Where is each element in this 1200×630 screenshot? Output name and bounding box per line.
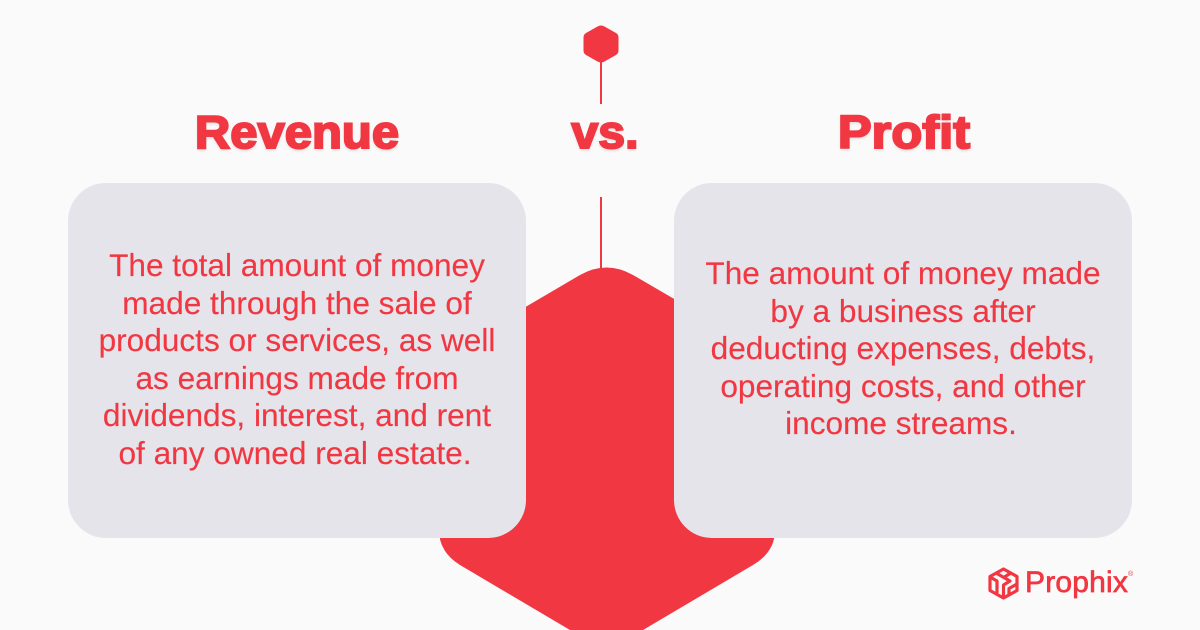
wordmark: Prophix xyxy=(1025,566,1128,598)
heading: Profit: Profit xyxy=(838,106,970,158)
connector line lower xyxy=(600,197,602,271)
text block: profit definition: income streams. xyxy=(785,405,1017,441)
text block: profit definition: The amount of money made xyxy=(705,255,1101,291)
text block: revenue definition: dividends, interest, and rent xyxy=(103,397,491,433)
heading: Revenue: Revenue xyxy=(195,106,399,158)
text block: revenue definition: The total amount of money xyxy=(109,247,485,283)
text block: revenue definition: made through the sale of xyxy=(122,285,472,321)
panel: revenue definition xyxy=(68,183,526,538)
text block: profit definition: deducting expenses, debts, xyxy=(711,330,1095,366)
logo: Prophix xyxy=(988,566,1134,600)
connector line upper xyxy=(600,62,602,104)
icon: small hexagon marker xyxy=(584,26,618,62)
text block: profit definition xyxy=(705,255,1101,441)
text block: profit definition: by a business after xyxy=(770,293,1036,329)
large red hexagon xyxy=(439,268,775,630)
text block: revenue definition xyxy=(99,247,495,471)
text block: revenue definition: products or services, as well xyxy=(99,322,495,358)
registered mark: ® xyxy=(1128,571,1133,578)
heading: vs.: vs. xyxy=(571,106,639,158)
icon: logo cube xyxy=(988,567,1019,600)
text block: profit definition: operating costs, and other xyxy=(720,368,1086,404)
text block: revenue definition: as earnings made from xyxy=(135,360,459,396)
panel: profit definition xyxy=(674,183,1132,538)
text block: revenue definition: of any owned real estate. xyxy=(118,435,472,471)
